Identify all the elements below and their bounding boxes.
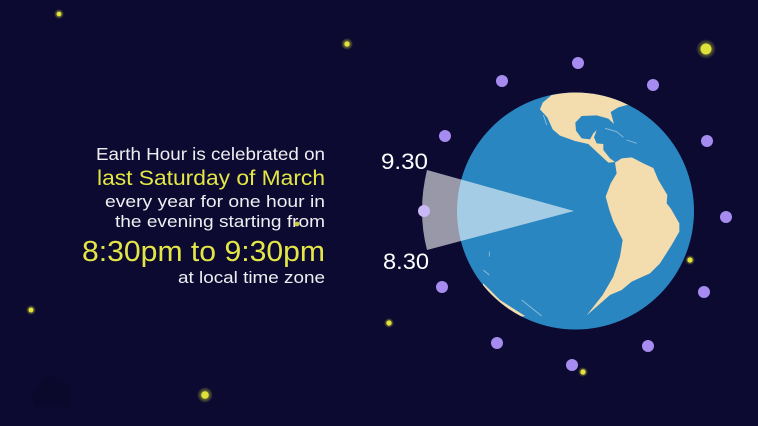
- label: 8.30: 8.30: [383, 249, 429, 274]
- North and Central America: [540, 90, 628, 163]
- line: Earth Hour is celebrated on: Earth Hour is celebrated on: [96, 144, 325, 164]
- South America: [587, 157, 679, 315]
- faint dark building silhouette: [32, 374, 70, 407]
- line: the evening starting from: the evening starting from: [115, 213, 325, 231]
- line: 8:30pm to 9:30pm: 8:30pm to 9:30pm: [82, 236, 325, 268]
- yellow star over text: [295, 222, 299, 226]
- islands and coastal details: [483, 115, 637, 316]
- label: 9.30: 9.30: [381, 149, 428, 174]
- purple dots ring: [418, 57, 732, 371]
- globe: [457, 90, 694, 329]
- Antarctic edge: [482, 284, 525, 317]
- line: last Saturday of March: last Saturday of March: [97, 167, 325, 190]
- line: at local time zone: at local time zone: [178, 269, 325, 287]
- description text block: [82, 144, 325, 287]
- time zone wedge: [422, 170, 574, 250]
- line: every year for one hour in: every year for one hour in: [105, 193, 325, 211]
